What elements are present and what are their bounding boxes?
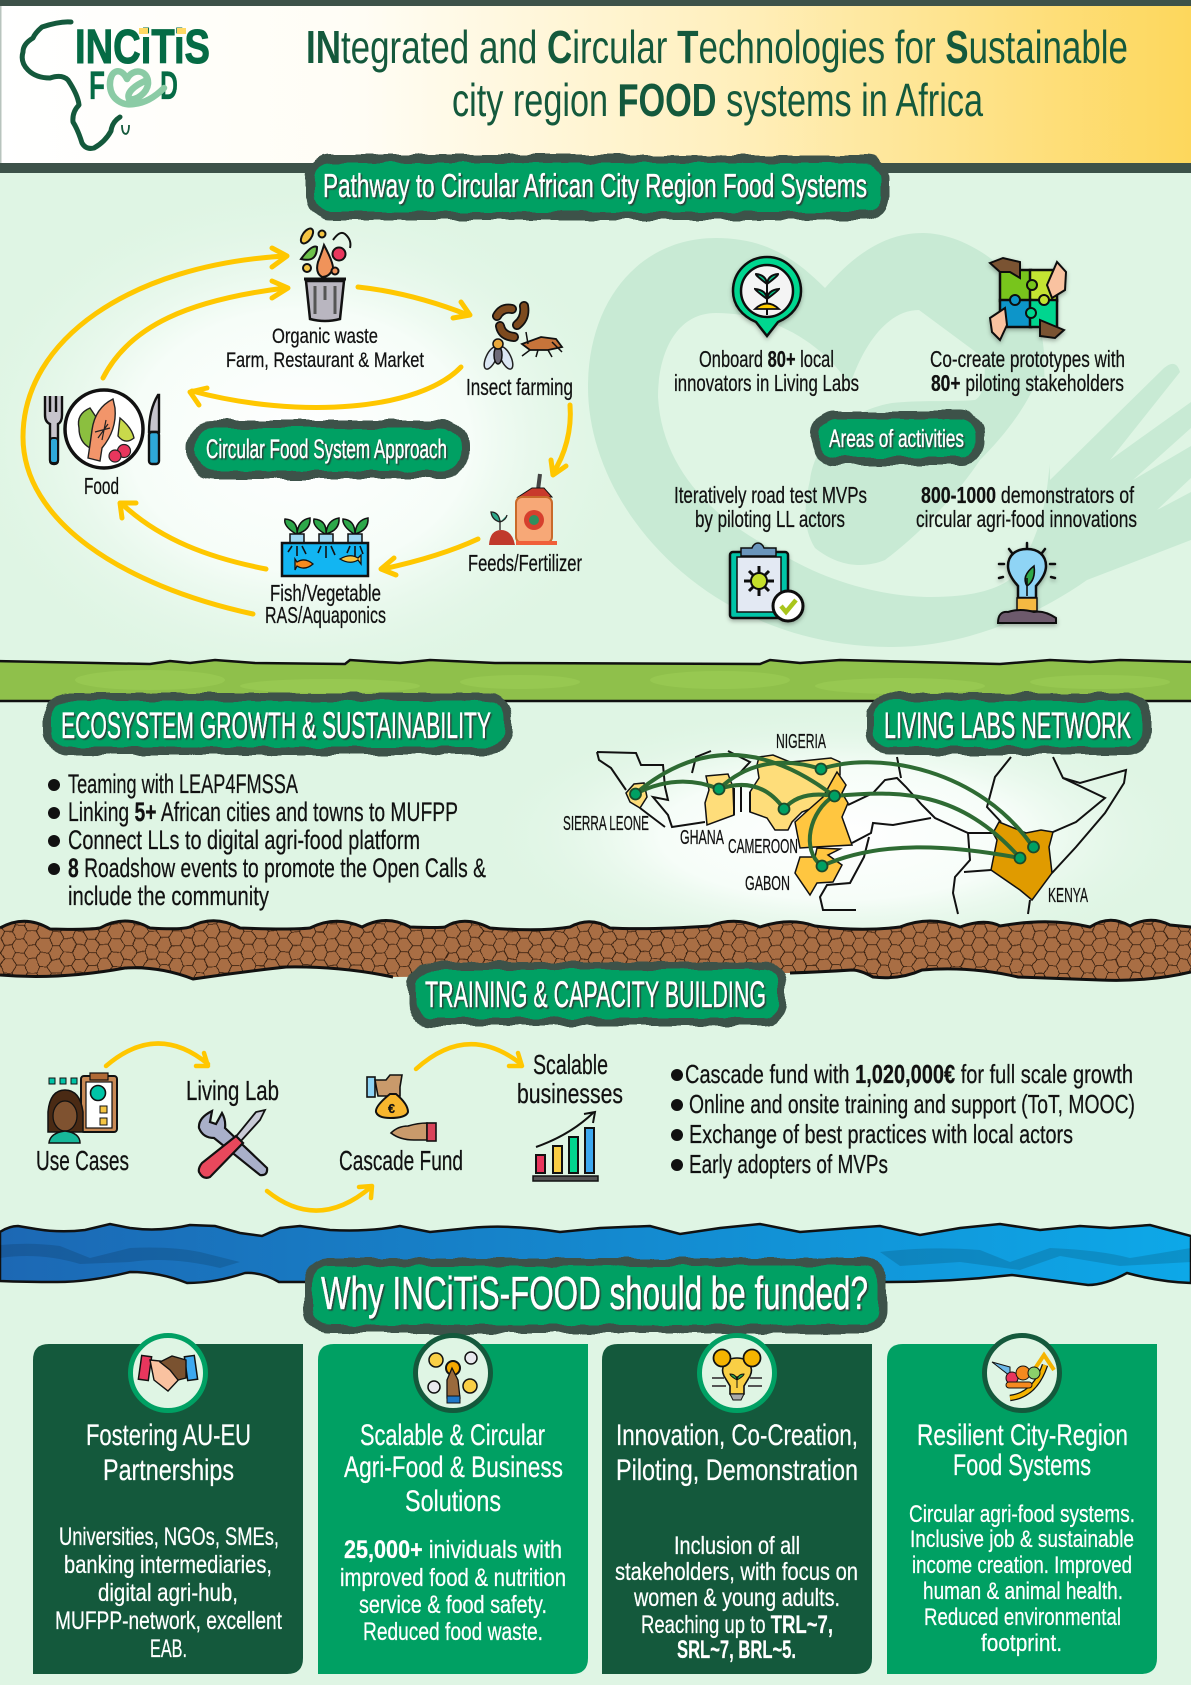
- card: Resilient City-Region Food Systems: [887, 1336, 1157, 1674]
- icon: light bulb with leaf: [998, 543, 1056, 623]
- icon: larvae, fly and cricket: [481, 306, 562, 371]
- bullet list: [671, 1059, 1135, 1179]
- card: Resilient City-Region Food Systems: income creation. Improved: [912, 1552, 1132, 1579]
- card: Resilient City-Region Food Systems: Inclusive job & sustainable: [910, 1526, 1134, 1553]
- heading: [43, 693, 512, 755]
- logo: INCiTiS FOOD: [22, 21, 210, 148]
- banner: Why INCiTiS-FOOD should be funded?: Why INCiTiS-FOOD should be funded?: [321, 1267, 868, 1319]
- country labels: SIERRA LEONE: [563, 813, 649, 835]
- panel: living labs network: [563, 693, 1151, 914]
- header panel: [0, 0, 1191, 173]
- bullet list: Cascade fund with 1,020,000€ for full scale growth: [685, 1059, 1133, 1089]
- card: Fostering AU-EU Partnerships: Partnerships: [103, 1454, 234, 1487]
- card: Scalable & Circular Agri-Food & Business Solutions: Agri-Food & Business: [344, 1451, 563, 1484]
- bullet list: Teaming with LEAP4FMSSA: [68, 769, 298, 799]
- country labels: GHANA: [680, 827, 724, 849]
- node: fish/vegetable aquaponics: [265, 518, 386, 628]
- country labels: KENYA: [1048, 885, 1088, 907]
- card: Innovation, Co-Creation, Piloting, Demonstration: women & young adults.: [633, 1584, 840, 1612]
- activity: demonstrators: 800-1000 demonstrators of: [921, 482, 1134, 508]
- card: Resilient City-Region Food Systems: human & animal health.: [923, 1578, 1123, 1605]
- panel: ecosystem growth & sustainability: [43, 693, 512, 911]
- bullet list: Linking 5+ African cities and towns to MUFPP: [68, 797, 458, 827]
- node: organic waste: [226, 226, 424, 372]
- icon: growth bars: [533, 1112, 598, 1181]
- icon: aquaponics tank: [282, 518, 368, 576]
- card: Scalable & Circular Agri-Food & Business Solutions: improved food & nutrition: [340, 1564, 566, 1592]
- card: Scalable & Circular Agri-Food & Business Solutions: 25,000+ inividuals with: [344, 1536, 562, 1564]
- card: Resilient City-Region Food Systems: footprint.: [981, 1630, 1062, 1657]
- card: Scalable & Circular Agri-Food & Business Solutions: Solutions: [405, 1485, 501, 1518]
- card: Innovation, Co-Creation, Piloting, Demonstration: Inclusion of all: [674, 1532, 800, 1560]
- activity: demonstrators: [916, 482, 1137, 623]
- node: insect farming: Insect farming: [466, 374, 573, 400]
- icon: food waste and bin: [298, 226, 350, 321]
- icon: clipboard with check: [730, 543, 803, 621]
- activity: onboard innovators: Onboard 80+ local: [699, 346, 834, 372]
- card: Scalable & Circular Agri-Food & Business Solutions: Scalable & Circular: [360, 1419, 545, 1452]
- activity: onboard innovators: [674, 257, 859, 396]
- activity: road test MVPs: Iteratively road test MVPs: [674, 482, 867, 508]
- step: living lab: Living Lab: [186, 1075, 279, 1106]
- step: cascade fund: [339, 1075, 463, 1176]
- step: use cases: Use Cases: [36, 1145, 129, 1176]
- node: organic waste: Organic waste: [272, 325, 378, 348]
- banner: Pathway to Circular African City Region Food Systems: [306, 155, 889, 220]
- card: Fostering AU-EU Partnerships: MUFPP-network, excellent: [55, 1607, 282, 1635]
- pathway background glow: [0, 180, 640, 700]
- icon: location pin with plant: [733, 257, 801, 336]
- step: scalable businesses: businesses: [517, 1078, 623, 1109]
- icon: money bag and hands: €: [388, 1101, 395, 1116]
- card: Fostering AU-EU Partnerships: [33, 1336, 303, 1674]
- card: Scalable & Circular Agri-Food & Business Solutions: Reduced food waste.: [363, 1618, 543, 1646]
- card: Resilient City-Region Food Systems: Reduced environmental: [924, 1604, 1121, 1631]
- panel: Areas of activities: Areas of activities: [829, 425, 964, 453]
- logo: INCiTiS FOOD: F: [89, 64, 105, 108]
- icon: puzzle and hands: [990, 258, 1066, 340]
- card: Resilient City-Region Food Systems: Resilient City-Region: [917, 1419, 1128, 1452]
- panel: training & capacity building: [36, 962, 1135, 1211]
- card: Fostering AU-EU Partnerships: EAB.: [150, 1635, 187, 1663]
- map background glow: [480, 705, 1191, 965]
- title: city region FOOD systems in Africa: [452, 74, 983, 126]
- water band: [0, 1224, 1191, 1285]
- network arcs: [635, 755, 1033, 866]
- flow arrows: [106, 1043, 522, 1211]
- icon: ideas and gears: [416, 1336, 490, 1410]
- step: cascade fund: Cascade Fund: [339, 1145, 463, 1176]
- activity: co-create prototypes: Co-create prototypes with: [930, 346, 1125, 372]
- step: scalable businesses: [517, 1049, 623, 1181]
- node: organic waste: Farm, Restaurant & Market: [226, 349, 424, 372]
- activity: co-create prototypes: [930, 258, 1125, 396]
- icon: knife: [149, 395, 159, 432]
- icon: fertilizer bag with sprout: [489, 474, 557, 545]
- icon: handshake: [130, 1336, 206, 1410]
- country labels: NIGERIA: [776, 731, 826, 753]
- panel: Areas of activities: [811, 411, 984, 465]
- country fills: [626, 755, 1053, 900]
- bullet list: [48, 769, 486, 911]
- step: living lab: [186, 1075, 279, 1178]
- country labels: [563, 731, 1088, 907]
- node: fish/vegetable aquaponics: RAS/Aquaponics: [265, 602, 386, 628]
- activity: road test MVPs: [674, 482, 867, 621]
- icon: gears and bulb: [700, 1336, 774, 1410]
- banner: Pathway to Circular African City Region Food Systems: Pathway to Circular African City Region Food Systems: [323, 167, 867, 204]
- panel: Circular Food System Approach: [187, 420, 469, 479]
- icon: plate with fish: [65, 390, 143, 468]
- node: fish/vegetable aquaponics: Fish/Vegetable: [270, 580, 381, 606]
- card: Scalable & Circular Agri-Food & Business Solutions: [318, 1336, 588, 1674]
- icon: fork: [45, 396, 62, 464]
- card: Innovation, Co-Creation, Piloting, Demonstration: stakeholders, with focus on: [615, 1558, 858, 1586]
- card: Scalable & Circular Agri-Food & Business Solutions: service & food safety.: [359, 1591, 547, 1619]
- card: Innovation, Co-Creation, Piloting, Demonstration: Innovation, Co-Creation,: [616, 1419, 858, 1452]
- icon: wrench and screwdriver: [199, 1110, 267, 1178]
- title: [306, 21, 1128, 126]
- banner: Why INCiTiS-FOOD should be funded?: [304, 1258, 887, 1333]
- heart-spoon-fork watermark: [588, 233, 1191, 647]
- node: food: Food: [84, 473, 119, 499]
- bullet list: Exchange of best practices with local actors: [689, 1119, 1073, 1149]
- title: INtegrated and Circular Technologies for Sustainable: [306, 21, 1128, 73]
- panel: Circular Food System Approach: Circular Food System Approach: [206, 434, 447, 464]
- bullet list: 8 Roadshow events to promote the Open Calls &: [68, 853, 486, 883]
- card: Resilient City-Region Food Systems: Food Systems: [953, 1449, 1091, 1482]
- network nodes: [630, 764, 1039, 872]
- activity: onboard innovators: innovators in Living Labs: [674, 370, 859, 396]
- heading: TRAINING & CAPACITY BUILDING: [425, 974, 766, 1015]
- bullet list: include the community: [68, 881, 269, 911]
- heading: [866, 693, 1151, 755]
- icon: woman with clipboard: [48, 1073, 117, 1143]
- activity: road test MVPs: by piloting LL actors: [695, 506, 845, 532]
- card: Innovation, Co-Creation, Piloting, Demonstration: [602, 1336, 872, 1674]
- card: Fostering AU-EU Partnerships: digital agri-hub,: [98, 1579, 238, 1607]
- bullet list: Connect LLs to digital agri-food platform: [68, 825, 420, 855]
- logo: INCiTiS FOOD: INCiTiS: [75, 21, 210, 74]
- soil band: [0, 918, 1191, 982]
- country labels: CAMEROON: [728, 836, 798, 858]
- card: Resilient City-Region Food Systems: Circular agri-food systems.: [909, 1501, 1135, 1528]
- node: feeds/fertilizer: [468, 474, 582, 576]
- icon: produce with rising arrow: [984, 1336, 1060, 1410]
- heading: ECOSYSTEM GROWTH & SUSTAINABILITY: [61, 705, 491, 746]
- step: scalable businesses: Scalable: [533, 1049, 608, 1080]
- node: insect farming: [466, 306, 573, 400]
- country labels: GABON: [745, 873, 790, 895]
- grass band: [0, 660, 1191, 701]
- node: feeds/fertilizer: Feeds/Fertilizer: [468, 550, 582, 576]
- heading: [408, 962, 786, 1026]
- card: Fostering AU-EU Partnerships: banking intermediaries,: [64, 1551, 272, 1579]
- node: food: [45, 390, 159, 499]
- bullet list: Early adopters of MVPs: [689, 1149, 888, 1179]
- card: Innovation, Co-Creation, Piloting, Demonstration: Reaching up to TRL~7,: [641, 1611, 833, 1639]
- card: Innovation, Co-Creation, Piloting, Demonstration: Piloting, Demonstration: [616, 1454, 858, 1487]
- card: Fostering AU-EU Partnerships: Universities, NGOs, SMEs,: [59, 1523, 279, 1551]
- map of Africa: [563, 731, 1126, 914]
- activity: co-create prototypes: 80+ piloting stakeholders: [931, 370, 1124, 396]
- card: Fostering AU-EU Partnerships: Fostering AU-EU: [86, 1419, 251, 1452]
- cycle arrows: [23, 248, 570, 614]
- map borders: [597, 751, 1126, 914]
- logo: INCiTiS FOOD: D: [160, 64, 178, 108]
- step: use cases: [36, 1073, 129, 1176]
- card: Innovation, Co-Creation, Piloting, Demonstration: SRL~7, BRL~5.: [677, 1636, 796, 1664]
